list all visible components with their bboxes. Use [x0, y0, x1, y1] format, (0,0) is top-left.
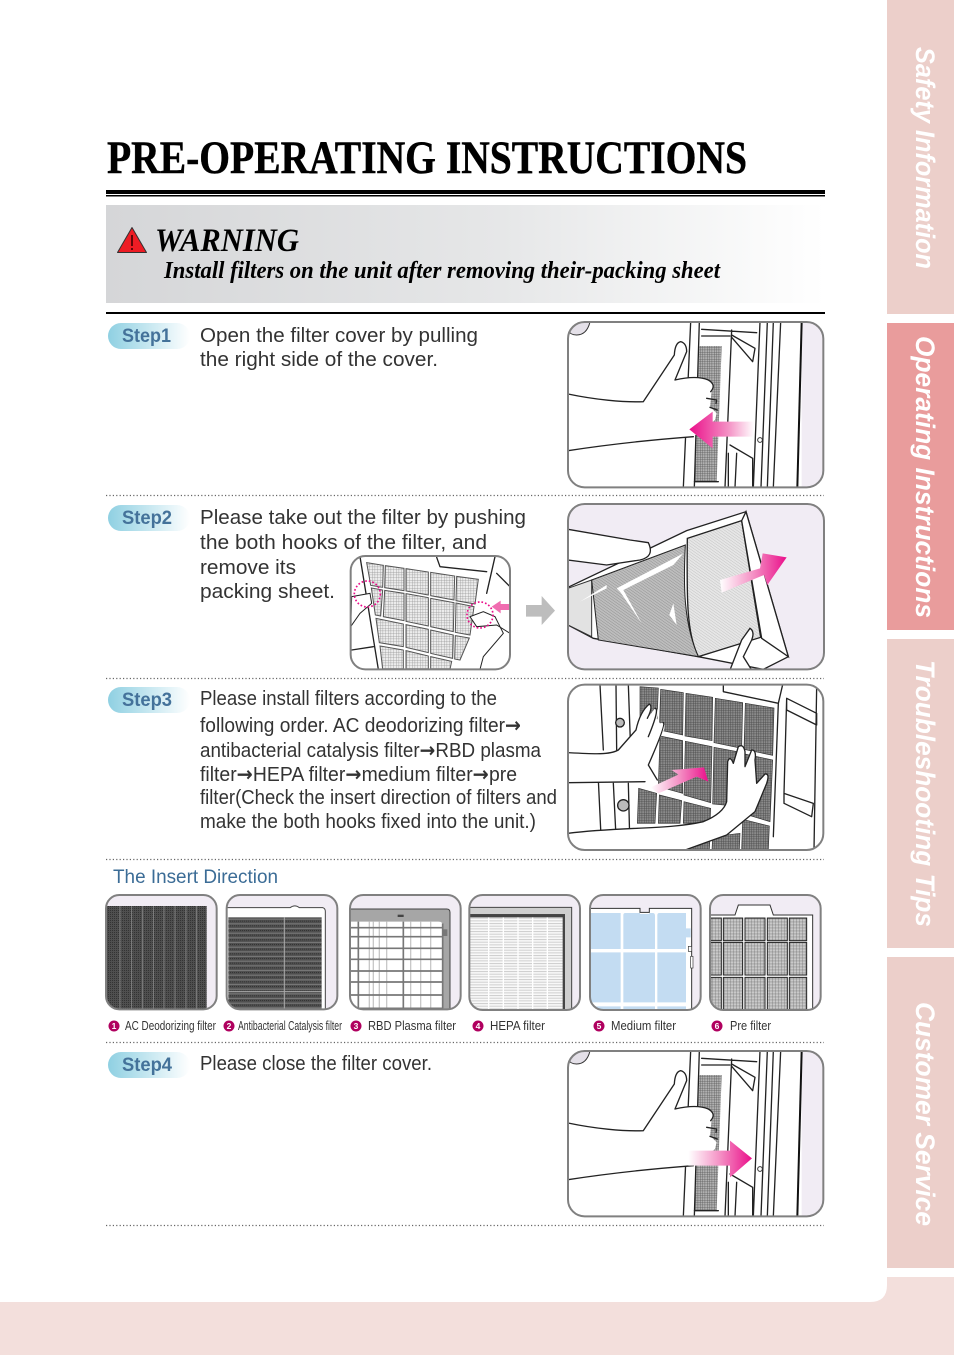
step 4 text: Please close the filter cover. — [200, 1052, 432, 1075]
side tab: Safety Information: Safety Information — [910, 47, 940, 269]
filter 1: AC deodorizing — [106, 895, 217, 1009]
step 3 text: filter→HEPA filter→medium filter→pre — [200, 762, 517, 786]
label 4: HEPA filter — [490, 1019, 545, 1033]
arrow: pull left — [689, 412, 754, 448]
arrow: next — [526, 596, 555, 625]
step 4 panel — [108, 1051, 825, 1216]
icon: warning triangle — [118, 228, 146, 252]
step 3 panel — [108, 685, 823, 851]
side tab: Troubleshooting Tips — [887, 639, 954, 948]
step 2 text: Please take out the filter by pushing — [200, 506, 526, 529]
step 3 badge: Step3 — [122, 690, 172, 711]
label 1: AC Deodorizing filter — [125, 1019, 216, 1033]
side tab: Customer Service: Customer Service — [910, 1002, 940, 1226]
step 1 panel — [108, 322, 825, 487]
step 1 badge: Step1 — [122, 326, 171, 347]
label 5: Medium filter — [611, 1019, 676, 1033]
label 3: 3 — [354, 1021, 359, 1031]
label 4: 4 — [476, 1021, 481, 1031]
step 2 text: packing sheet. — [200, 580, 335, 603]
step 4 illustration: closing the filter cover — [568, 1051, 825, 1216]
label 2 — [224, 1019, 342, 1033]
step 2 panel — [108, 504, 824, 670]
step 2 badge — [108, 505, 190, 531]
arrow: push right — [688, 1141, 752, 1177]
step 2 illustrations — [351, 504, 824, 670]
step 2 text: the both hooks of the filter, and — [200, 531, 487, 554]
label 6 — [712, 1019, 771, 1033]
side tab: Safety Information — [887, 0, 954, 314]
step 2 badge: Step2 — [122, 508, 172, 529]
filter thumbnails, row left — [106, 895, 461, 1009]
step 3 text: Please install filters according to the — [200, 687, 497, 710]
filter 5: medium — [590, 895, 701, 1011]
step 3 text: following order. AC deodorizing filter→ — [200, 713, 521, 737]
filter labels — [108, 1019, 771, 1033]
label 2: 2 — [227, 1021, 232, 1031]
step 2 text — [200, 506, 526, 603]
title rule — [106, 190, 825, 196]
label 3: RBD Plasma filter — [368, 1019, 456, 1033]
step 1 text: Open the filter cover by pulling — [200, 324, 478, 347]
footer band — [0, 1277, 954, 1355]
label 5: 5 — [597, 1021, 602, 1031]
step 3 badge — [108, 687, 190, 713]
side tab: Troubleshooting Tips: Troubleshooting Tips — [910, 660, 940, 927]
filter thumbnails, row right — [469, 895, 821, 1011]
warning panel — [106, 205, 825, 303]
heading: the insert direction: The Insert Direction — [113, 867, 278, 888]
step 1 text: the right side of the cover. — [200, 348, 438, 371]
title: PRE-OPERATING INSTRUCTIONS — [107, 132, 747, 184]
filter 2: antibacterial catalysis — [227, 895, 337, 1009]
step 2 text: remove its — [200, 556, 296, 579]
illustration: removing the packing sheet — [568, 504, 824, 670]
warning heading: WARNING — [155, 223, 299, 259]
step 1 badge — [108, 323, 190, 349]
illustration: pushing both hooks — [351, 556, 510, 669]
label 2: Antibacterial Catalysis filter — [238, 1019, 342, 1033]
filter 3: RBD plasma — [350, 895, 461, 1009]
filter 4: HEPA — [469, 895, 580, 1011]
step 1 illustration: pulling the filter cover — [568, 322, 825, 487]
filter 6: pre filter — [710, 895, 821, 1011]
side tab: Operating Instructions (active) — [887, 323, 954, 630]
step 3 text: filter(Check the insert direction of filters and — [200, 786, 557, 809]
step 1 text — [200, 324, 478, 371]
step 3 text: make the both hooks fixed into the unit.) — [200, 810, 536, 833]
step 4 badge: Step4 — [122, 1055, 172, 1076]
label 6: 6 — [715, 1021, 720, 1031]
step 3 illustration: installing filters — [568, 685, 823, 851]
label 6: Pre filter — [730, 1019, 771, 1033]
side tab: Customer Service — [887, 957, 954, 1268]
side tab: Operating Instructions (active): Operating Instructions — [910, 336, 940, 618]
label 1: 1 — [112, 1021, 117, 1031]
label 1 — [108, 1019, 216, 1033]
step 3 text — [200, 687, 557, 833]
step 3 text: antibacterial catalysis filter→RBD plasma — [200, 738, 542, 762]
warning message: Install filters on the unit after removing their-packing sheet — [163, 258, 721, 284]
step 4 badge — [108, 1052, 190, 1078]
